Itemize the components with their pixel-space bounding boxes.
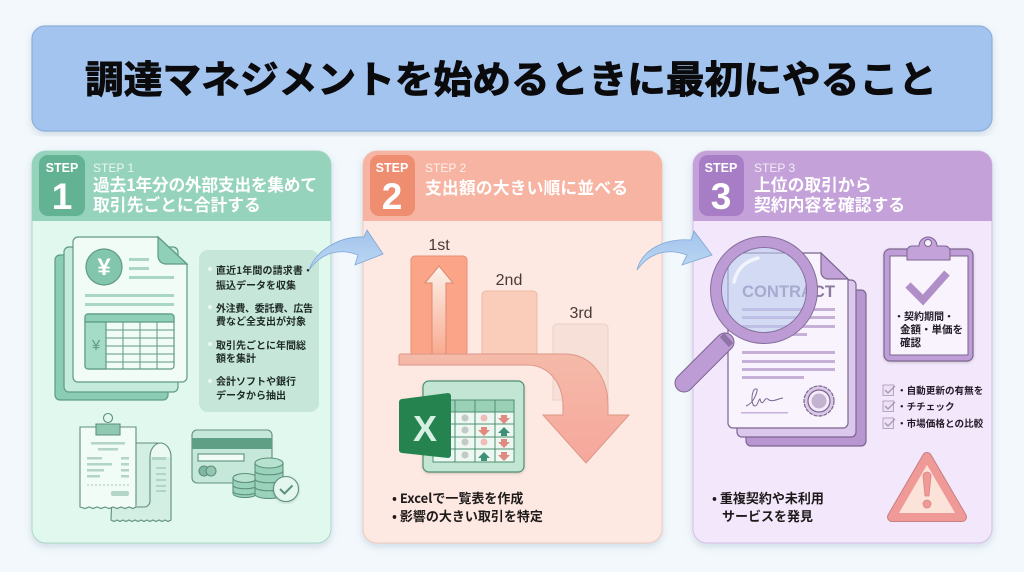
icon: magnifying glass	[684, 236, 818, 383]
panel: step 1	[32, 151, 331, 543]
checklist items: ・市場価格との比較	[897, 416, 984, 430]
icon: invoice document stack: ¥	[97, 254, 111, 281]
step 3 heading: 上位の取引から	[754, 172, 871, 196]
step 1 bullet list: 外注費、委託費、広告	[216, 300, 313, 315]
step 3 bullet list	[712, 488, 824, 525]
bar: 1st: 1st	[428, 237, 450, 254]
checklist items	[883, 383, 984, 430]
icon: excel sheet	[399, 381, 524, 472]
icon: warning triangle	[892, 457, 962, 517]
step 1 heading: 取引先ごとに合計する	[93, 192, 261, 216]
step 2 badge	[370, 155, 415, 217]
step 3 heading: STEP 3	[754, 161, 795, 175]
step 1 bullet list: データから抽出	[216, 387, 286, 402]
step 3 badge: 3	[711, 176, 731, 217]
step 3 badge: STEP	[705, 161, 737, 175]
step 1 heading: STEP 1	[93, 161, 134, 175]
step 3 heading	[754, 161, 905, 216]
icon: clipboard checklist	[884, 237, 973, 361]
icon: clipboard checklist: 確認	[900, 335, 921, 350]
icon: credit card and coins	[192, 430, 298, 502]
step 1 header	[32, 151, 331, 221]
checklist items: ・チチェック	[897, 399, 955, 413]
step 2 heading: 支出額の大きい順に並べる	[425, 175, 628, 199]
step 1 heading: 過去1年分の外部支出を集めて	[93, 172, 317, 196]
panel: step 2	[363, 151, 662, 543]
step 2 bullet list: • Excelで一覧表を作成	[392, 488, 523, 507]
arrow: step 1 to step 2	[309, 230, 383, 270]
step 1 badge	[39, 155, 85, 217]
step 2 header	[363, 151, 662, 221]
step 1 bullet list: 取引先ごとに年間総	[216, 337, 306, 352]
step 2 bullet list	[392, 488, 543, 525]
icon: excel sheet: X	[413, 408, 437, 449]
step 1 bullet list	[199, 250, 319, 412]
step 3 bullet list: • 重複契約や未利用	[712, 488, 824, 507]
bar: 1st	[411, 237, 467, 356]
icon: invoice document stack	[55, 237, 187, 400]
ranked bar chart	[399, 237, 629, 463]
step 1 heading	[93, 161, 317, 216]
title: 調達マネジメントを始めるときに最初にやること	[85, 49, 937, 104]
step 2 heading	[425, 161, 628, 199]
title banner	[32, 26, 992, 131]
bar: 3rd	[553, 305, 608, 400]
icon: receipt	[80, 414, 171, 522]
step 3 bullet list: サービスを発見	[722, 506, 813, 525]
step 2 bullet list: • 影響の大きい取引を特定	[392, 506, 543, 525]
icon: invoice document stack: ¥	[91, 337, 101, 354]
step 1 bullet list: 振込データを収集	[216, 277, 296, 292]
icon: contract stack: CONTRACT	[742, 282, 836, 301]
icon: clipboard checklist: ・契約期間・	[894, 308, 954, 323]
panel: step 3	[684, 151, 992, 543]
step 2 heading: STEP 2	[425, 161, 466, 175]
down arrow	[399, 354, 629, 463]
step 3 badge	[699, 155, 744, 217]
checklist items: ・自動更新の有無を	[897, 383, 983, 397]
step 3 header	[693, 151, 992, 221]
bar: 2nd	[482, 272, 537, 356]
step 3 heading: 契約内容を確認する	[754, 192, 905, 216]
step 2 badge: STEP	[376, 161, 408, 175]
step 1 bullet list: 直近1年間の請求書・	[216, 262, 313, 277]
step 1 bullet list: 額を集計	[216, 350, 256, 365]
arrow: step 2 to step 3	[637, 231, 712, 270]
icon: clipboard checklist: 金額・単価を	[900, 322, 963, 337]
bar: 3rd: 3rd	[569, 305, 593, 322]
step 2 badge: 2	[382, 176, 402, 217]
step 1 bullet list: 費など全支出が対象	[216, 313, 306, 328]
step 1 badge: STEP	[46, 161, 78, 175]
step 1 badge: 1	[52, 176, 72, 217]
icon: contract stack	[728, 253, 866, 446]
step 1 bullet list: 会計ソフトや銀行	[216, 373, 296, 388]
bar: 2nd: 2nd	[496, 272, 522, 289]
